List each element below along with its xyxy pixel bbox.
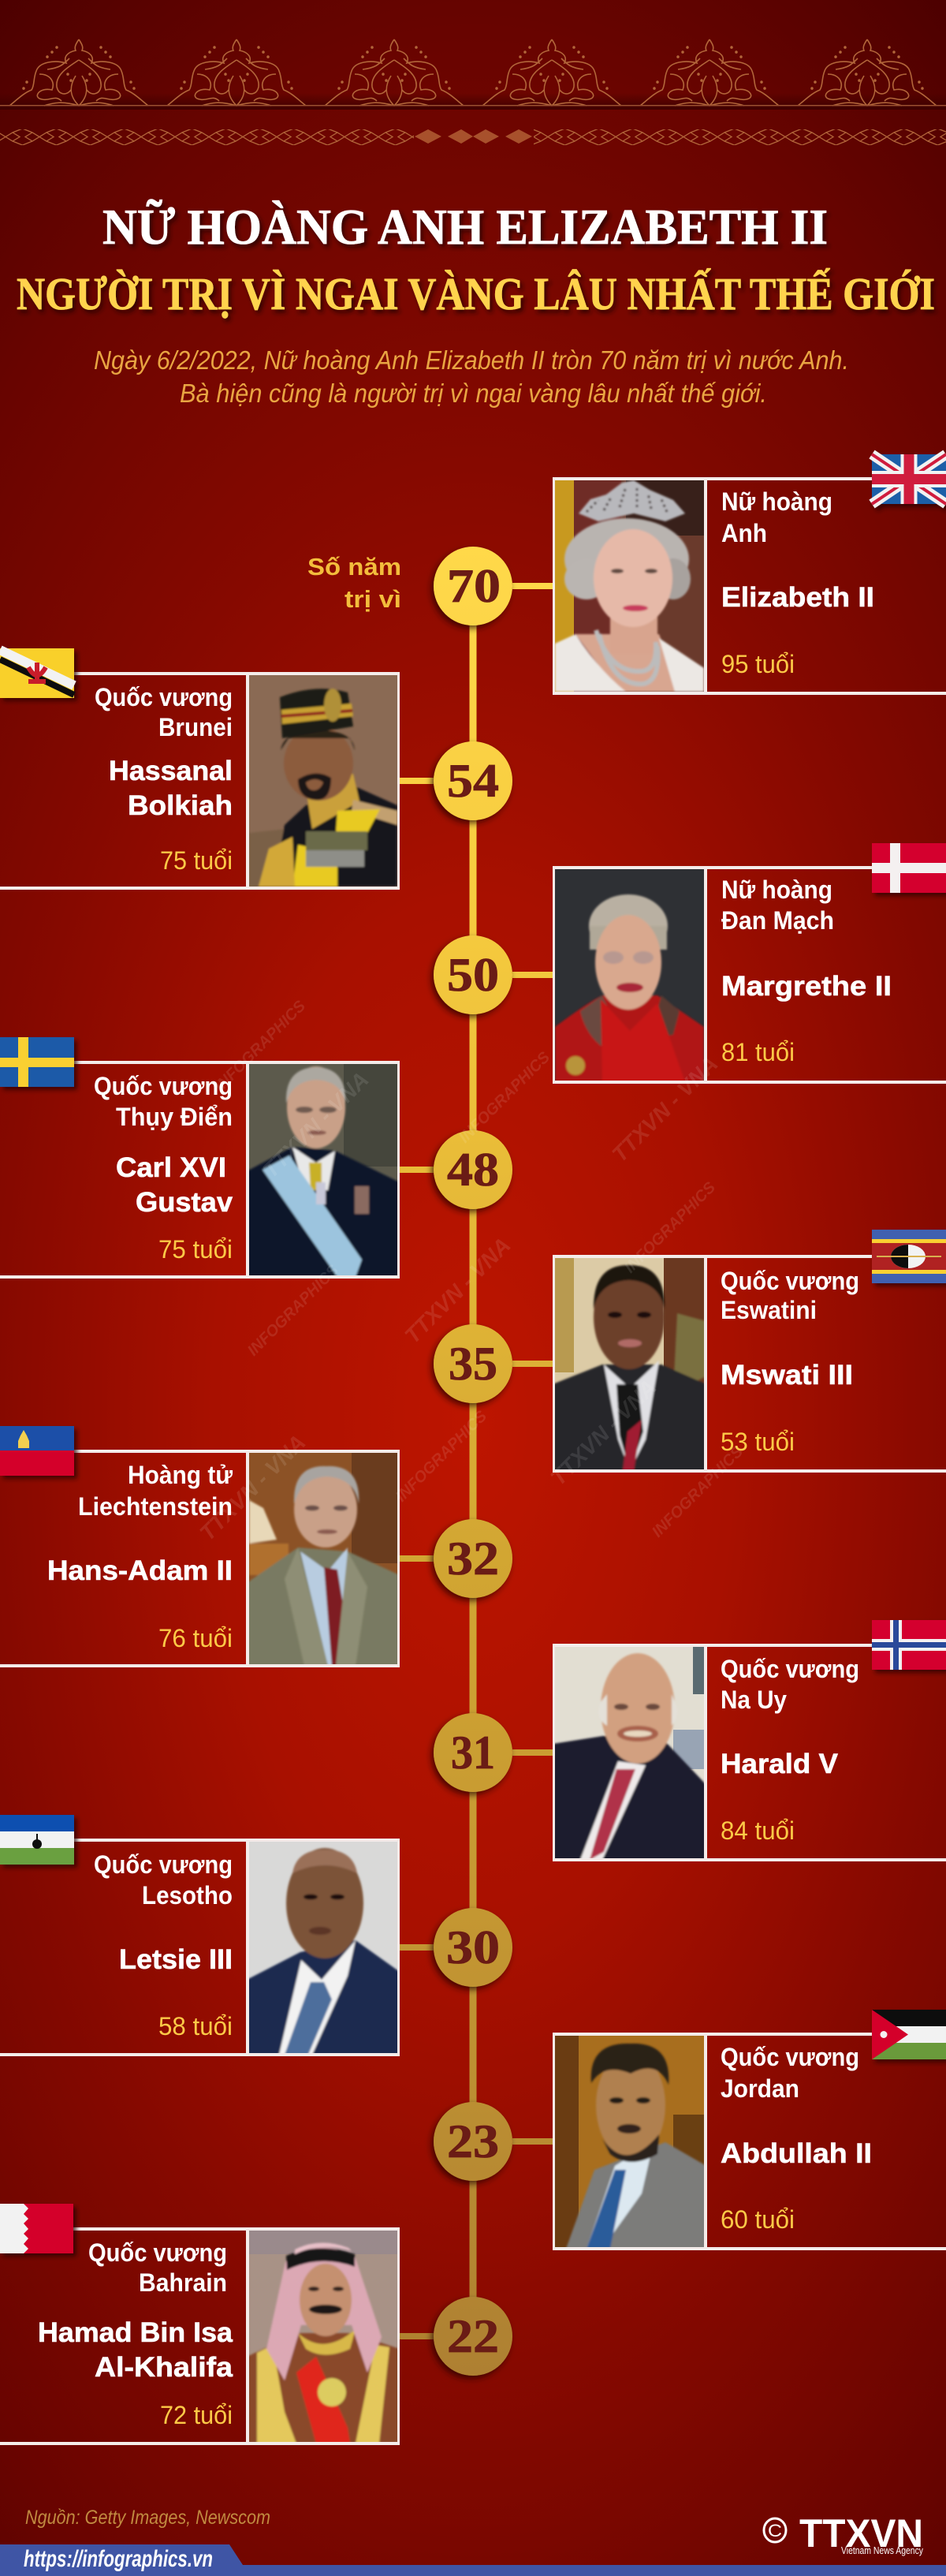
year circle 54 (434, 741, 512, 820)
card (0, 1450, 400, 1667)
logo TTXVN: Vietnam News Agency (841, 2544, 923, 2556)
text: Letsie III (119, 1944, 233, 1975)
logo TTXVN: C (768, 2521, 782, 2541)
text: Hans-Adam II (47, 1555, 233, 1586)
text: Nữ hoàng (721, 875, 832, 904)
photo (249, 1842, 397, 2053)
photo (555, 869, 704, 1081)
connector (512, 1361, 553, 1367)
year circle 50: 50 (447, 949, 499, 1001)
year circle 50 (434, 935, 512, 1014)
year circle 23 (434, 2102, 512, 2181)
watermarks: TTXVN - VNA (258, 1067, 374, 1182)
watermarks: TTXVN - VNA (400, 1233, 516, 1348)
entry: Hassanal Bolkiah (0, 648, 512, 890)
card (0, 2227, 400, 2445)
photo (555, 480, 704, 692)
watermarks: INFOGRAPHICS (621, 1178, 719, 1277)
text: Carl XVI (116, 1152, 226, 1183)
text: 75 tuổi (160, 846, 233, 875)
card (553, 1255, 946, 1473)
photo (249, 675, 397, 887)
text: 53 tuổi (721, 1428, 795, 1456)
entry: Elizabeth II (434, 454, 946, 695)
year circle 23: 23 (447, 2115, 499, 2167)
connector (512, 583, 553, 589)
watermarks: INFOGRAPHICS (211, 997, 309, 1096)
footer bar with url: https://infographics.vn (24, 2546, 213, 2572)
year circle 22 (434, 2297, 512, 2376)
entry: Abdullah II (434, 2010, 946, 2250)
watermarks (195, 997, 747, 1545)
footer bar with url (0, 2544, 946, 2576)
text: Quốc vương (88, 2238, 227, 2267)
text: 75 tuổi (158, 1235, 233, 1264)
text (94, 1850, 233, 2040)
text: Brunei (158, 713, 233, 741)
text (95, 683, 233, 875)
photo (555, 2036, 704, 2247)
photo (555, 1647, 704, 1858)
entry: Hamad Bin Isa Al-Khalifa (0, 2204, 512, 2445)
card (0, 1061, 400, 1279)
card (553, 477, 946, 695)
flag: Lesotho (0, 1815, 80, 1871)
connector (400, 778, 434, 784)
year circle 48 (434, 1130, 512, 1209)
intro text: Bà hiện cũng là người trị vì ngai vàng lâu nhất thế giới. (180, 379, 767, 408)
text (38, 2238, 233, 2429)
year circle 31: 31 (451, 1727, 495, 1779)
photo (249, 2231, 397, 2442)
entry: Margrethe II (434, 843, 946, 1084)
connector (400, 1167, 434, 1173)
label: years of reign: Số năm (307, 553, 401, 581)
text: Al-Khalifa (95, 2352, 233, 2383)
text: Quốc vương (721, 2043, 859, 2071)
text: 58 tuổi (158, 2012, 233, 2040)
text (721, 487, 874, 678)
text: Na Uy (721, 1686, 787, 1714)
card (553, 2033, 946, 2250)
watermarks: INFOGRAPHICS (393, 1407, 490, 1506)
text (721, 1655, 859, 1845)
text: 95 tuổi (721, 650, 795, 678)
text: Gustav (136, 1187, 233, 1218)
card (0, 672, 400, 890)
text: 84 tuổi (721, 1816, 795, 1845)
card (0, 1839, 400, 2056)
flag: Denmark (872, 843, 946, 899)
text (721, 1267, 859, 1456)
text: Harald V (721, 1749, 839, 1779)
text: Quốc vương (95, 683, 233, 711)
year circle 31 (434, 1713, 512, 1792)
entry: Carl XVI Gustav (0, 1037, 512, 1279)
year circle 35: 35 (449, 1338, 497, 1390)
text: 60 tuổi (721, 2205, 795, 2234)
text: Hassanal (109, 756, 233, 786)
connector (400, 2333, 434, 2339)
year circle 30: 30 (446, 1921, 500, 1973)
text: Elizabeth II (721, 582, 874, 613)
flag: Sweden (0, 1037, 80, 1093)
connector (400, 1555, 434, 1562)
text: Abdullah II (721, 2138, 872, 2169)
text: Đan Mạch (721, 906, 834, 935)
year circle 54: 54 (447, 755, 499, 807)
text: Bahrain (139, 2268, 227, 2297)
intro text (94, 345, 849, 408)
photo (249, 1064, 397, 1275)
watermarks: TTXVN - VNA (195, 1430, 311, 1545)
watermarks: INFOGRAPHICS (456, 1048, 553, 1147)
year circle 70 (434, 547, 512, 625)
connector (400, 1944, 434, 1951)
label: years of reign: trị vì (345, 585, 401, 613)
flag: Brunei (0, 645, 81, 704)
entry: Mswati III (434, 1230, 946, 1473)
ornamental header band (0, 39, 946, 145)
text: Quốc vương (721, 1655, 859, 1683)
flag: Jordan (872, 2010, 946, 2065)
text (47, 1461, 233, 1652)
flag: Norway (872, 1620, 946, 1676)
text: Quốc vương (94, 1850, 233, 1879)
text: 81 tuổi (721, 1038, 795, 1066)
photo (555, 1258, 704, 1469)
intro text: Ngày 6/2/2022, Nữ hoàng Anh Elizabeth II tròn 70 năm trị vì nước Anh. (94, 345, 849, 375)
text: Bolkiah (128, 790, 233, 821)
title: NỮ HOÀNG ANH ELIZABETH II (102, 199, 828, 255)
connector (512, 2138, 553, 2145)
connector (512, 972, 553, 978)
text: Hoàng tử (128, 1461, 233, 1489)
year circle 22: 22 (447, 2310, 499, 2362)
logo TTXVN: TTXVN (799, 2511, 923, 2555)
watermarks: TTXVN - VNA (607, 1051, 723, 1167)
year circle 30 (434, 1908, 512, 1987)
entry: Harald V (434, 1620, 946, 1861)
text: Mswati III (721, 1360, 853, 1391)
watermarks: INFOGRAPHICS (244, 1261, 342, 1360)
title (17, 199, 935, 319)
text: Lesotho (142, 1881, 233, 1910)
photo (249, 1453, 397, 1664)
card (553, 866, 946, 1084)
text (721, 2043, 872, 2234)
year circle 32: 32 (447, 1533, 499, 1585)
text: Eswatini (721, 1296, 817, 1324)
flag: Liechtenstein (0, 1426, 80, 1482)
flag: Bahrain (0, 2204, 80, 2259)
year circle 48: 48 (447, 1144, 499, 1196)
label: years of reign (307, 553, 401, 613)
watermarks: INFOGRAPHICS (649, 1443, 747, 1541)
year circle 35 (434, 1324, 512, 1403)
entry: Hans-Adam II (0, 1426, 512, 1667)
text: Margrethe II (721, 971, 892, 1002)
text: 72 tuổi (160, 2401, 233, 2429)
entry: Letsie III (0, 1815, 512, 2056)
text: Liechtenstein (78, 1492, 233, 1521)
text: 76 tuổi (158, 1624, 233, 1652)
flag: UK (869, 450, 946, 513)
timeline spine (470, 586, 476, 2336)
year circle 32 (434, 1519, 512, 1598)
text: Nữ hoàng (721, 487, 832, 516)
text (721, 875, 892, 1066)
connector (512, 1749, 553, 1756)
flag: Eswatini (872, 1230, 946, 1290)
source: Nguồn: Getty Images, Newscom (25, 2507, 270, 2529)
text: Jordan (721, 2074, 799, 2103)
text: Anh (721, 519, 767, 547)
watermarks: TTXVN - VNA (546, 1375, 661, 1490)
text: Quốc vương (94, 1072, 233, 1100)
text: Thụy Điển (116, 1103, 233, 1131)
year circle 70: 70 (447, 560, 501, 612)
text: Hamad Bin Isa (38, 2317, 233, 2348)
card (553, 1644, 946, 1861)
text: Quốc vương (721, 1267, 859, 1295)
text (94, 1072, 233, 1264)
